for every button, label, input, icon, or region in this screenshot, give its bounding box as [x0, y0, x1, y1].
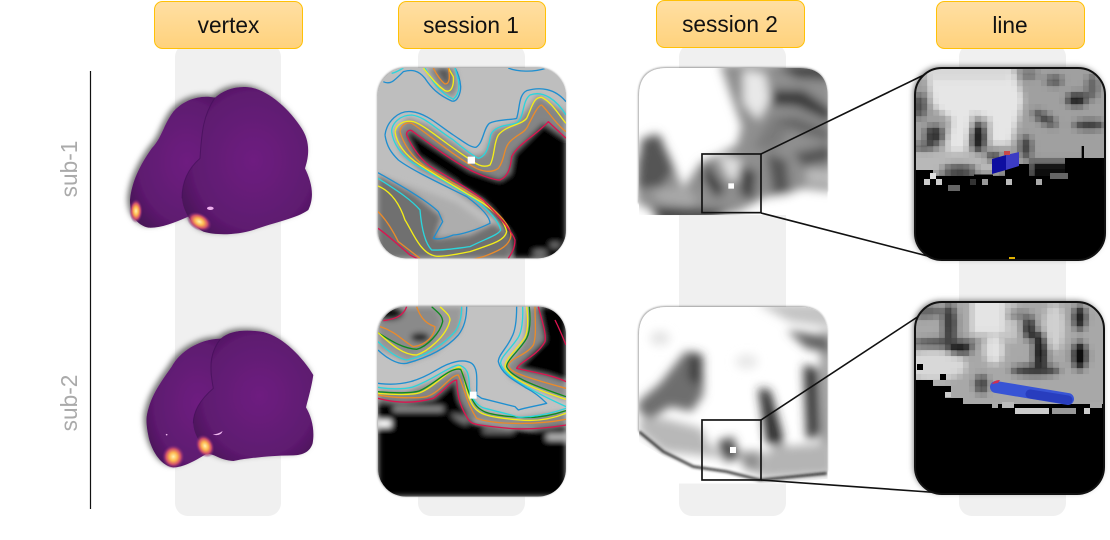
target vertex marker — [730, 447, 736, 453]
heading: vertex: vertex — [198, 12, 260, 38]
brain surface: sub-2 — [146, 331, 313, 469]
MRI anatomy — [377, 307, 566, 497]
zoom inset box — [702, 420, 761, 480]
contour lines — [378, 307, 566, 429]
row label: sub-2: sub-2 — [56, 375, 82, 431]
MRI slice: session 2, sub-1 — [637, 63, 833, 220]
heading: session 1: session 1 — [423, 12, 519, 38]
column band: vertex — [175, 44, 281, 516]
MRI slice with contours: session 1, sub-2 — [377, 307, 566, 497]
zoom connector lines: sub-1 — [761, 73, 943, 260]
heading: vertex — [154, 2, 302, 48]
row label: sub-1: sub-1 — [56, 141, 82, 197]
voxel image — [916, 303, 1103, 404]
fitted line: blue voxels — [992, 151, 1019, 259]
fitted line: blue tube — [992, 380, 1068, 400]
stray voxels — [924, 173, 1068, 191]
zoom connector lines: sub-2 — [761, 312, 943, 493]
column band: session 2 — [679, 44, 786, 516]
stray voxels — [917, 364, 1102, 414]
zoom inset box — [702, 154, 761, 213]
column band: line — [959, 44, 1066, 516]
heading: session 1 — [398, 2, 546, 48]
heading: line — [936, 2, 1084, 48]
brain surface: sub-1 — [129, 87, 312, 236]
target vertex marker — [470, 392, 477, 399]
target vertex marker — [728, 183, 734, 189]
contour lines — [378, 68, 566, 260]
heading: session 2 — [656, 0, 804, 48]
MRI slice: session 2, sub-2 — [637, 305, 829, 484]
MRI slice with contours: session 1, sub-1 — [378, 68, 566, 260]
row axis line — [90, 71, 92, 509]
voxel image — [916, 69, 1104, 176]
zoomed MRI with line: sub-2 — [902, 289, 1110, 494]
column band: session 1 — [418, 44, 525, 516]
zoomed MRI with line: sub-1 — [910, 62, 1108, 262]
target vertex marker — [468, 157, 475, 164]
MRI anatomy — [378, 68, 566, 258]
heading: line: line — [992, 12, 1028, 38]
heading: session 2: session 2 — [682, 11, 778, 37]
